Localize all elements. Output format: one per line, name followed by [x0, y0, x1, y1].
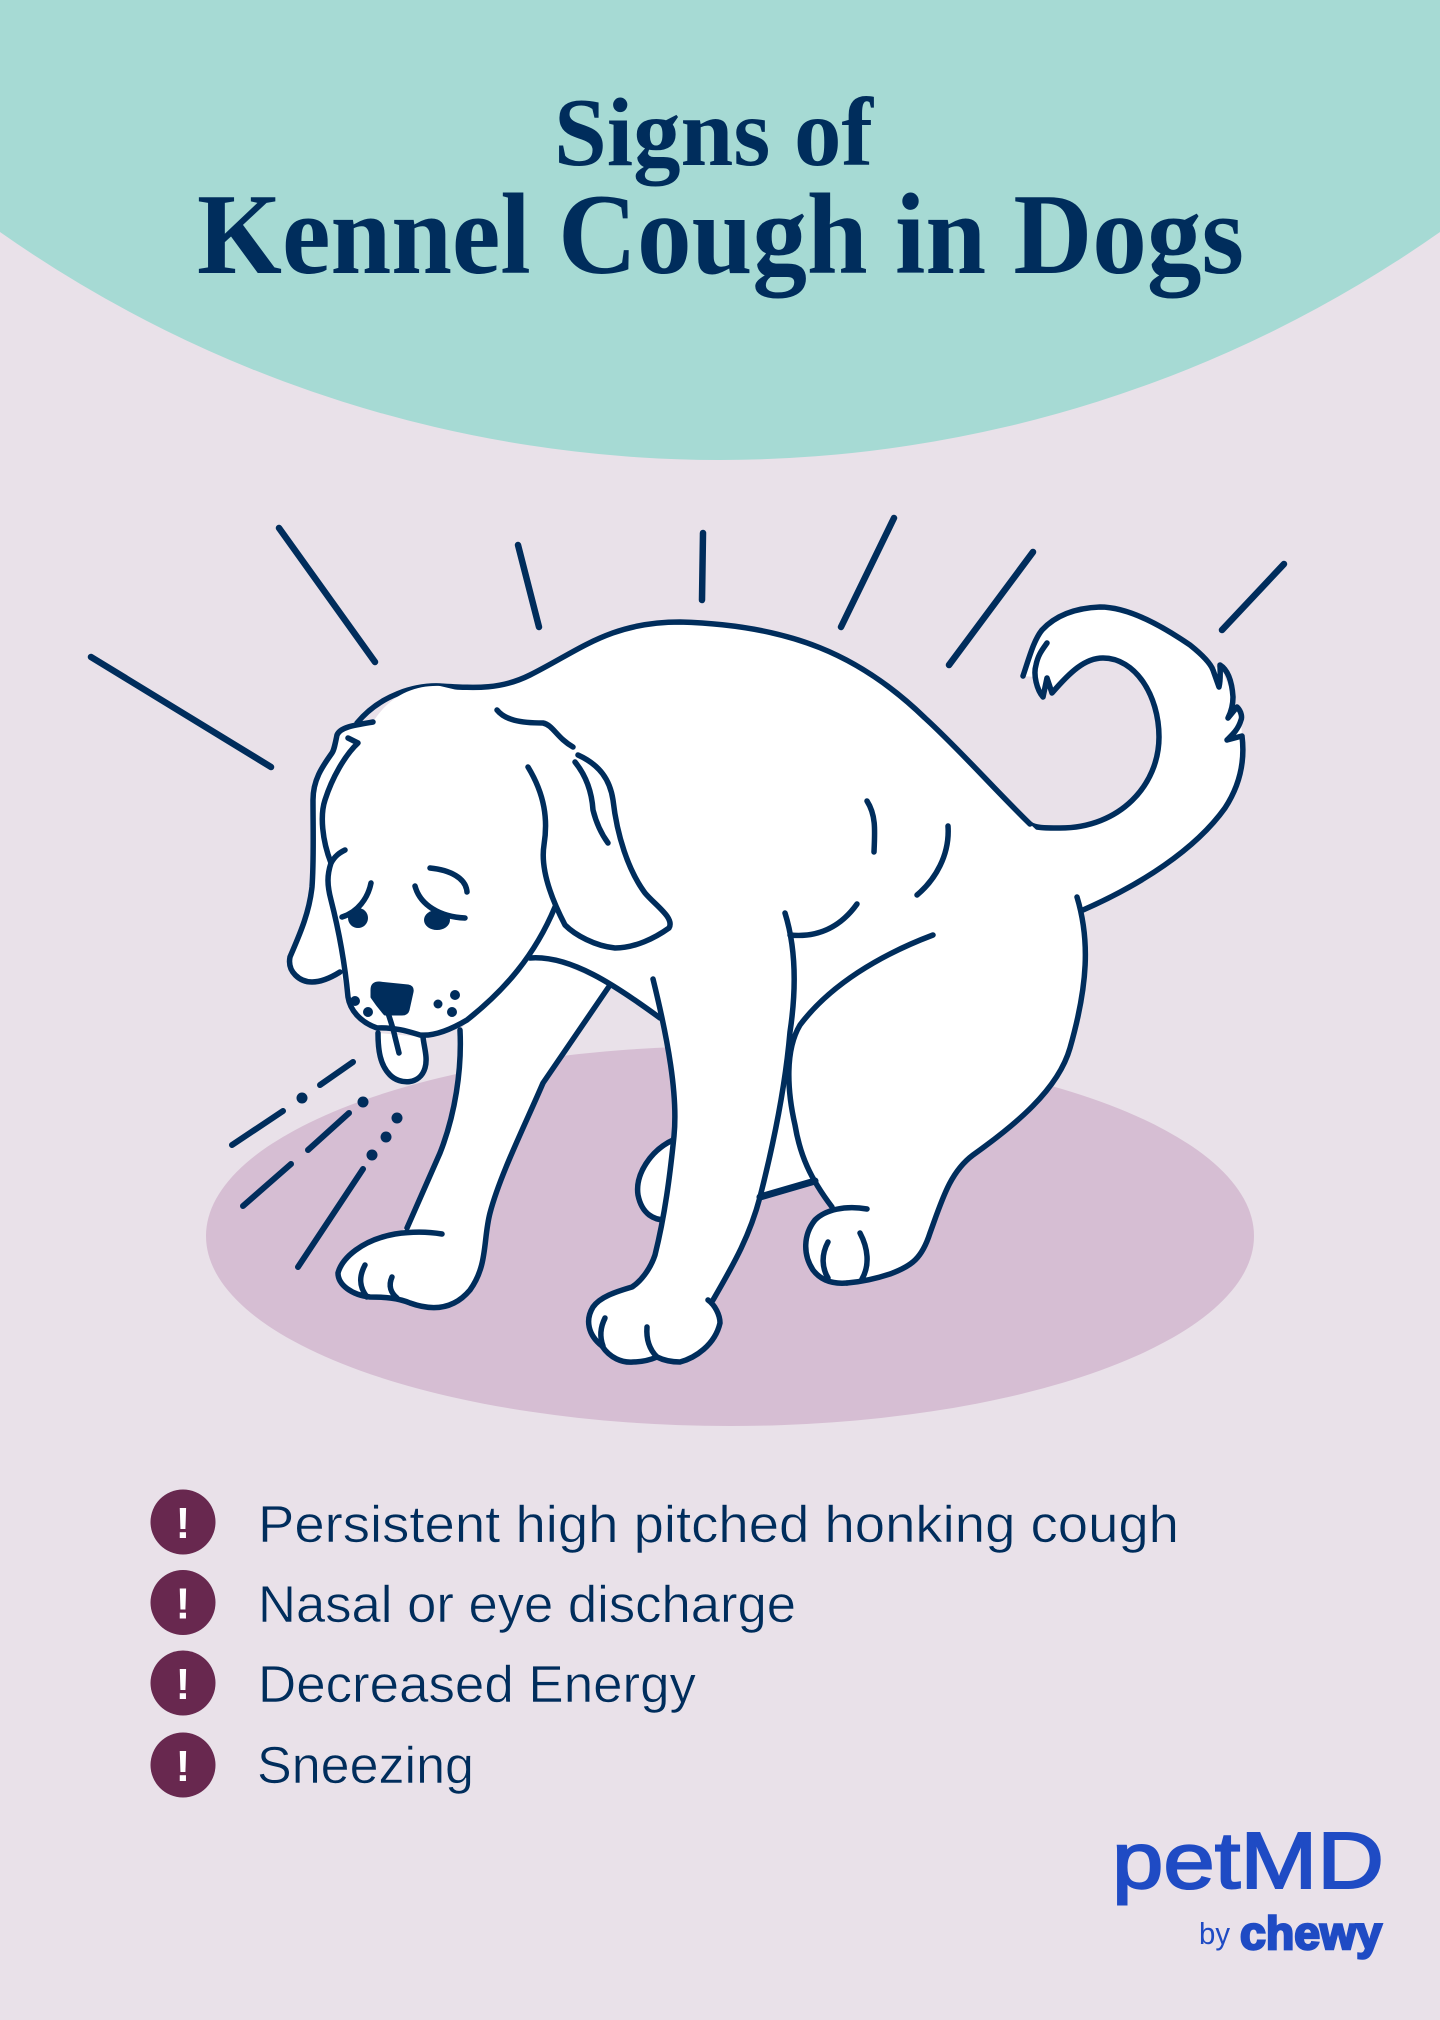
title: Kennel Cough in Dogs — [197, 171, 1244, 298]
item 4 — [150, 1732, 474, 1798]
petMD by chewy logo: chewy — [1240, 1907, 1382, 1959]
dog head — [290, 686, 670, 1082]
ground ellipse — [206, 1046, 1254, 1426]
item 3: Decreased Energy — [258, 1656, 696, 1714]
nose and mouth — [350, 983, 460, 1053]
far hind paw bump — [638, 1139, 675, 1220]
item 2: Nasal or eye discharge — [258, 1576, 796, 1634]
far front leg — [338, 950, 610, 1308]
tongue — [378, 1033, 426, 1082]
impact rays around dog — [91, 518, 1284, 767]
dog illustration — [290, 607, 1243, 1362]
body and near legs — [357, 622, 1090, 1362]
title: Signs of — [554, 79, 874, 187]
title — [197, 79, 1244, 298]
item 3: ! — [176, 1660, 190, 1709]
symptoms list — [150, 1490, 1179, 1798]
right ear — [497, 710, 670, 948]
tail — [1023, 607, 1243, 910]
item 1: Persistent high pitched honking cough — [258, 1496, 1179, 1554]
item 2: ! — [176, 1580, 190, 1628]
item 4: Sneezing — [257, 1737, 474, 1795]
eyes — [342, 868, 467, 930]
petMD by chewy logo — [1112, 1816, 1384, 1959]
petMD by chewy logo: by — [1199, 1916, 1230, 1951]
teal header arc — [0, 0, 1440, 460]
sneeze lines and droplets — [232, 1062, 402, 1267]
item 1: ! — [176, 1499, 190, 1548]
petMD by chewy logo: petMD — [1112, 1816, 1384, 1905]
item 4: ! — [176, 1742, 190, 1791]
